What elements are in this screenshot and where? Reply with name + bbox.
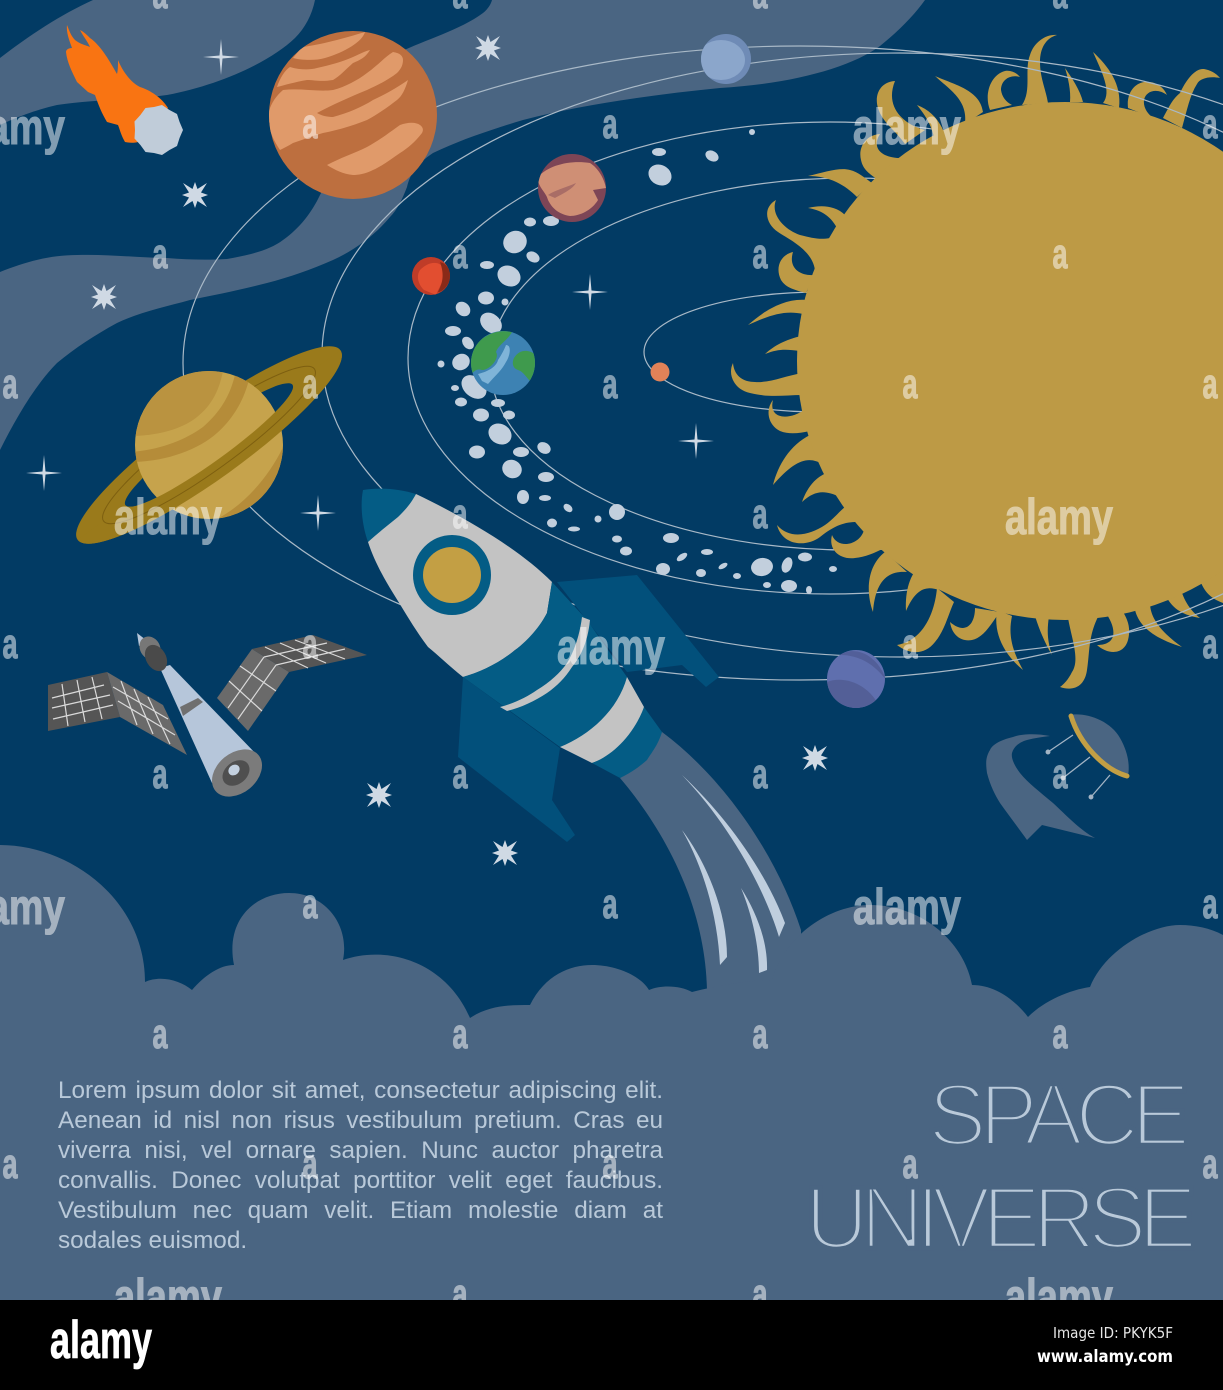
watermark overlay: a bbox=[602, 100, 618, 147]
earth bbox=[470, 331, 536, 395]
space telescope satellite bbox=[48, 633, 367, 806]
watermark overlay: a bbox=[2, 620, 18, 667]
neptune bbox=[827, 650, 886, 712]
watermark overlay: a bbox=[1052, 750, 1068, 797]
comet bbox=[66, 25, 183, 155]
mars bbox=[412, 257, 450, 295]
watermark overlay: a bbox=[752, 750, 768, 797]
watermark overlay: a bbox=[452, 230, 468, 277]
footer logo: alamy bbox=[50, 1311, 152, 1370]
saturn bbox=[76, 346, 342, 544]
watermark overlay: alamy bbox=[1005, 489, 1113, 545]
body text block: Vestibulum nec quam velit. Etiam molestie diam at bbox=[58, 1197, 663, 1224]
watermark overlay: a bbox=[302, 880, 318, 927]
haze band top left bbox=[0, 0, 315, 125]
watermark overlay: a bbox=[152, 750, 168, 797]
watermark overlay: a bbox=[602, 880, 618, 927]
watermark overlay: alamy bbox=[853, 99, 961, 155]
clouds bbox=[0, 845, 1223, 1300]
watermark overlay: alamy bbox=[557, 619, 665, 675]
watermark overlay: a bbox=[752, 230, 768, 277]
body text block: Lorem ipsum dolor sit amet, consectetur adipiscing elit. bbox=[58, 1077, 663, 1104]
asteroid belt bbox=[438, 129, 837, 594]
sun bbox=[797, 102, 1223, 620]
pink planet bbox=[537, 154, 606, 222]
orbits: inner bbox=[408, 122, 1223, 594]
jupiter bbox=[268, 31, 437, 199]
body text block bbox=[58, 1077, 663, 1254]
orbits: outer bbox=[183, 46, 1223, 680]
watermark overlay: a bbox=[1052, 1010, 1068, 1057]
stars bbox=[26, 35, 828, 866]
title: UNIVERSE bbox=[805, 1168, 1197, 1267]
watermark overlay: a bbox=[602, 360, 618, 407]
ufo swoosh bbox=[986, 734, 1095, 840]
watermark overlay: alamy bbox=[114, 1269, 222, 1325]
small blue planet bbox=[697, 34, 751, 84]
watermark overlay: a bbox=[152, 1010, 168, 1057]
watermark overlay: alamy bbox=[114, 489, 222, 545]
watermark overlay: a bbox=[602, 1140, 618, 1187]
watermark overlay: a bbox=[902, 360, 918, 407]
rocket exhaust bbox=[620, 732, 801, 990]
mercury bbox=[650, 362, 670, 382]
watermark overlay: a bbox=[302, 620, 318, 667]
body text block: Aenean id nisl non risus vestibulum pretium. Cras eu bbox=[58, 1107, 663, 1134]
watermark overlay: a bbox=[752, 490, 768, 537]
watermark overlay: a bbox=[302, 100, 318, 147]
rocket bbox=[362, 489, 719, 842]
ufo bbox=[1046, 714, 1129, 799]
watermark overlay: a bbox=[302, 360, 318, 407]
watermark overlay: a bbox=[152, 230, 168, 277]
haze band diagonal bbox=[0, 0, 925, 450]
watermark overlay: a bbox=[302, 1140, 318, 1187]
watermark overlay: a bbox=[902, 620, 918, 667]
watermark overlay: a bbox=[452, 750, 468, 797]
watermark overlay: alamy bbox=[1005, 1269, 1113, 1325]
watermark overlay: a bbox=[452, 1270, 468, 1317]
body text block: convallis. Donec volutpat porttitor velit eget faucibus. bbox=[58, 1167, 663, 1194]
title: SPACE bbox=[928, 1065, 1190, 1164]
watermark overlay: a bbox=[752, 1270, 768, 1317]
watermark overlay: alamy bbox=[853, 879, 961, 935]
watermark overlay: a bbox=[2, 360, 18, 407]
sun rays bbox=[731, 35, 1223, 689]
watermark overlay: a bbox=[902, 1140, 918, 1187]
footer bar bbox=[0, 1300, 1223, 1390]
watermark overlay: a bbox=[752, 1010, 768, 1057]
body text block: viverra nisi, vel ornare sapien. Nunc auctor pharetra bbox=[58, 1137, 663, 1164]
title bbox=[805, 1065, 1197, 1267]
body text block: sodales euismod. bbox=[58, 1227, 247, 1254]
website: www.alamy.com bbox=[1037, 1347, 1173, 1367]
watermark overlay: a bbox=[452, 1010, 468, 1057]
watermark overlay: a bbox=[1052, 230, 1068, 277]
image id: Image ID: PKYK5F bbox=[1053, 1324, 1173, 1342]
watermark overlay: a bbox=[2, 1140, 18, 1187]
watermark overlay: a bbox=[452, 490, 468, 537]
